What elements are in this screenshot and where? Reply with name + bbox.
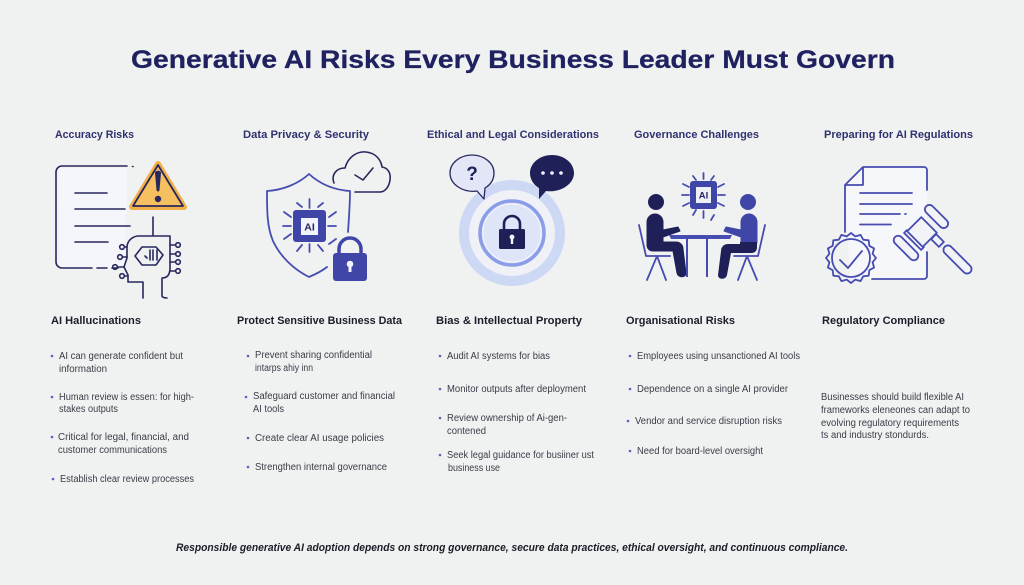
bullet list: AI hallucinations: AI can generate confident but (59, 351, 183, 362)
bullet list: bias and intellectual property: Seek legal guidance for busiiner ust (447, 450, 594, 461)
bullet list: organisational risks: Dependence on a single AI provider (637, 384, 789, 395)
heading: accuracy risks: Accuracy Risks (55, 129, 134, 141)
bullet list: AI hallucinations: stakes outputs (59, 404, 118, 415)
bullet list: AI hallucinations (51, 351, 194, 485)
text block: regulatory compliance (821, 392, 970, 441)
text block: regulatory compliance: evolving regulatory requirements (821, 418, 959, 429)
bullet list: AI hallucinations: Establish clear review processes (60, 474, 194, 485)
panel: data privacy and security (237, 129, 403, 473)
title: Generative AI Risks Every Business Leader Must Govern (131, 46, 895, 74)
bullet list: AI hallucinations: customer communications (58, 445, 167, 456)
bullet list: bias and intellectual property: Audit AI systems for bias (447, 351, 550, 362)
bullet list: AI hallucinations: Human review is essen: for high- (59, 392, 194, 403)
bullet list: bias and intellectual property (439, 351, 594, 474)
bullet list: organisational risks: Vendor and service disruption risks (635, 416, 782, 427)
text block: regulatory compliance: frameworks eleneones can adapt to (821, 405, 970, 416)
bullet list: AI hallucinations: Critical for legal, financial, and (58, 432, 189, 443)
bullet list: protect sensitive business data (245, 350, 395, 473)
subheading: organisational risks: Organisational Risks (626, 315, 735, 327)
panel: preparing for AI regulations (821, 129, 973, 441)
subheading: protect sensitive business data: Protect Sensitive Business Data (237, 315, 403, 327)
bullet list: organisational risks: Employees using unsanctioned AI tools (637, 351, 800, 362)
bullet list: bias and intellectual property: business use (448, 463, 500, 474)
subheading: regulatory compliance: Regulatory Compliance (822, 315, 945, 327)
icon: two people at a table with AI chip (639, 173, 765, 280)
bullet list: protect sensitive business data: Prevent sharing confidential (255, 350, 372, 361)
icon: shield, AI chip, lock and cloud (267, 152, 390, 281)
text block: regulatory compliance: Businesses should build flexible AI (821, 392, 964, 403)
subheading: AI hallucinations: AI Hallucinations (51, 315, 141, 327)
bullet list: bias and intellectual property: Review ownership of Ai-gen- (447, 413, 567, 424)
bullet list: protect sensitive business data: AI tools (253, 404, 284, 415)
bullet list: AI hallucinations: information (59, 364, 107, 375)
heading: data privacy and security: Data Privacy & Security (243, 129, 370, 141)
bullet list: protect sensitive business data: Strengthen internal governance (255, 462, 387, 473)
panel: accuracy risks (51, 129, 194, 485)
heading: ethical and legal considerations: Ethical and Legal Considerations (427, 129, 599, 141)
bullet list: protect sensitive business data: Safeguard customer and financial (253, 391, 395, 402)
bullet list: bias and intellectual property: contened (447, 426, 486, 437)
subheading: bias and intellectual property: Bias & Intellectual Property (436, 315, 583, 327)
icon: document, warning triangle and AI head (56, 164, 184, 298)
icon: padlock in rings with speech bubbles: ? (466, 164, 478, 185)
footer statement: Responsible generative AI adoption depends on strong governance, secure data practices, ethical oversight, and continuous compliance. (176, 542, 848, 554)
icon: shield, AI chip, lock and cloud: AI (304, 222, 315, 234)
heading: governance challenges: Governance Challenges (634, 129, 759, 141)
bullet list: protect sensitive business data: intarps ahiy inn (255, 363, 313, 374)
text block: regulatory compliance: ts and industry stondurds. (821, 430, 929, 441)
bullet list: organisational risks: Need for board-level oversight (637, 446, 763, 457)
bullet list: bias and intellectual property: Monitor outputs after deployment (447, 384, 586, 395)
bullet list: protect sensitive business data: Create clear AI usage policies (255, 433, 384, 444)
icon: two people at a table with AI chip: AI (699, 190, 708, 202)
panel: ethical and legal considerations (427, 129, 599, 474)
icon: document, gavel and approval seal (826, 167, 973, 283)
icon: padlock in rings with speech bubbles (450, 155, 574, 281)
bullet list: organisational risks (627, 351, 800, 457)
heading: preparing for AI regulations: Preparing for AI Regulations (824, 129, 973, 141)
panel: governance challenges (626, 129, 800, 457)
